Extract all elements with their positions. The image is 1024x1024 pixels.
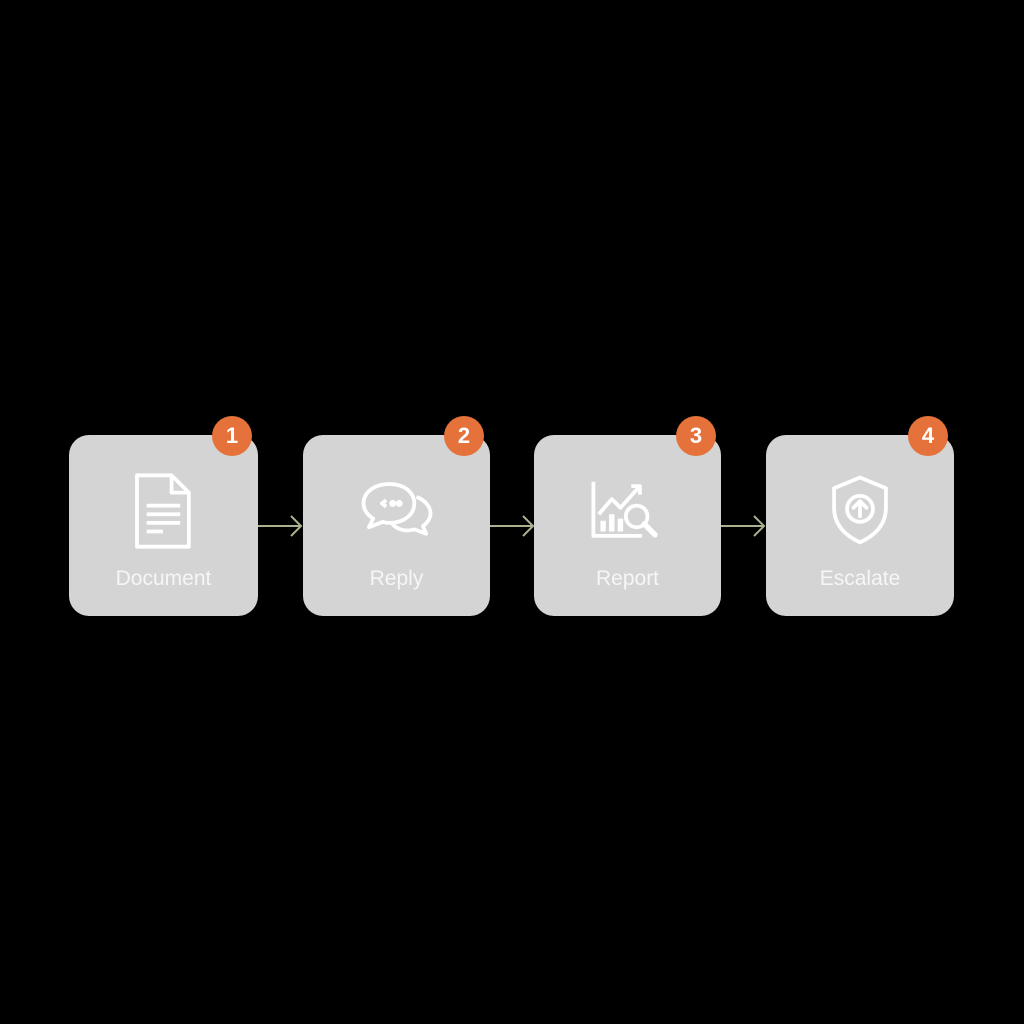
- icon: chart with magnifier: [592, 482, 658, 538]
- badge 4: 4: [922, 423, 934, 448]
- badge 4: [908, 416, 948, 456]
- arrow 3: [721, 515, 766, 537]
- badge 3: 3: [690, 423, 702, 448]
- badge 2: [444, 416, 484, 456]
- badge 1: 1: [226, 423, 238, 448]
- badge 3: [676, 416, 716, 456]
- arrow 1: [258, 515, 302, 537]
- step 4: Escalate: [766, 435, 954, 616]
- label: Document: [116, 567, 211, 590]
- step 1: Document: [69, 435, 258, 616]
- arrow 2: [490, 515, 534, 537]
- label: Report: [596, 567, 659, 590]
- label: Reply: [370, 567, 423, 590]
- step 3: Report: [534, 435, 721, 616]
- icon: shield arrow: [832, 476, 888, 544]
- step 2: Reply: [303, 435, 490, 616]
- badge 2: 2: [458, 423, 470, 448]
- icon: chat bubbles: [362, 482, 432, 536]
- label: Escalate: [820, 567, 900, 590]
- badge 1: [212, 416, 252, 456]
- icon: document: [135, 473, 191, 549]
